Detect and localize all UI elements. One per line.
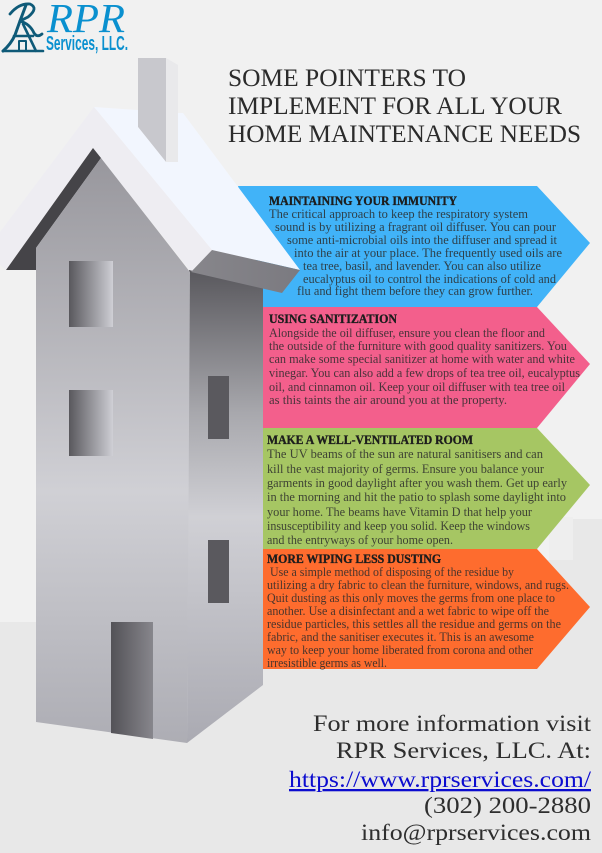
text block: ventilation xyxy=(267,446,567,547)
text block: ventilation: garments in good daylight after you wash them. Get up early xyxy=(267,475,567,490)
title xyxy=(228,65,581,148)
text block: immunity: flu and fight them before they can grow further. xyxy=(297,283,533,298)
heading: make a well-ventilated room: MAKE A WELL-VENTILATED ROOM xyxy=(267,433,473,447)
footer: contact information: info@rprservices.com xyxy=(361,820,591,845)
text block: wiping: residue particles, this settles all the residue and germs on the xyxy=(267,616,561,631)
logo: RPR Services, LLC. xyxy=(3,0,128,55)
text block: sanitization: can make some special sanitizer at home with water and white xyxy=(269,351,575,366)
text block: wiping: Quit dusting as this only moves the germs from one place to xyxy=(267,590,555,605)
window: front lower xyxy=(69,390,113,456)
window: side upper xyxy=(208,376,229,439)
text block: immunity: tea tree, basil, and lavender. You can also utilize xyxy=(303,258,541,273)
text block: wiping xyxy=(267,564,569,670)
roof eave xyxy=(191,250,300,293)
text block: wiping: another. Use a disinfectant and a wet fabric to wipe off the xyxy=(267,603,549,618)
text block: ventilation: kill the vast majority of germs. Ensure you balance your xyxy=(267,461,545,476)
text block: wiping: irresistible germs as well. xyxy=(267,655,387,670)
footer: contact information: RPR Services, LLC. At: xyxy=(336,738,591,763)
roof: right slope xyxy=(94,107,300,270)
panel: maintaining your immunity xyxy=(238,186,590,307)
title: SOME POINTERS TO xyxy=(228,65,466,92)
wall: side xyxy=(187,270,263,743)
icon: RA house monogram xyxy=(3,4,43,51)
window: side lower xyxy=(208,540,229,603)
text block: sanitization xyxy=(269,325,580,407)
text block: sanitization: oil, and cinnamon oil. Keep your oil diffuser with tea tree oil xyxy=(269,379,565,394)
title: HOME MAINTENANCE NEEDS xyxy=(228,121,581,148)
heading: more wiping less dusting: MORE WIPING LESS DUSTING xyxy=(267,552,441,566)
text block: ventilation: in the morning and hit the patio to splash some daylight into xyxy=(267,489,566,504)
text block: ventilation: insusceptibility and keep you solid. Keep the windows xyxy=(267,518,530,533)
title: IMPLEMENT FOR ALL YOUR xyxy=(228,93,562,120)
footer: contact information xyxy=(289,711,592,845)
door xyxy=(111,622,153,739)
text block: ventilation: The UV beams of the sun are natural sanitisers and can xyxy=(267,446,543,461)
text block: immunity xyxy=(269,206,562,298)
panel: make a well-ventilated room xyxy=(263,428,590,549)
footer: contact information: https://www.rprservices.com/ xyxy=(289,767,592,792)
text block: sanitization: as this taints the air around you at the property. xyxy=(269,392,507,407)
text block: wiping: Use a simple method of disposing of the residue by xyxy=(270,564,514,579)
text block: immunity: into the air at your place. The frequently used oils are xyxy=(294,245,562,260)
roof: front gable band xyxy=(0,107,212,272)
text block: sanitization: vinegar. You can also add a few drops of tea tree oil, eucalyptus xyxy=(269,365,580,380)
illustration: house xyxy=(0,58,300,743)
text block: immunity: sound is by utilizing a fragrant oil diffuser. You can pour xyxy=(275,219,557,234)
footer: contact information: (302) 200-2880 xyxy=(424,793,591,818)
arrow: pink xyxy=(263,307,590,428)
text block: sanitization: Alongside the oil diffuser, ensure you clean the floor and xyxy=(269,325,545,340)
text block: ventilation: your home. The beams have Vitamin D that help your xyxy=(267,504,533,519)
panel: more wiping less dusting xyxy=(263,549,590,670)
arrow: blue xyxy=(238,186,590,307)
gable shadow xyxy=(6,148,101,270)
heading: maintaining your immunity: MAINTAINING YOUR IMMUNITY xyxy=(269,194,457,208)
chimney xyxy=(138,58,178,162)
arrow: orange xyxy=(263,549,590,669)
text block: ventilation: and the entryways of your home open. xyxy=(267,532,453,547)
text block: immunity: some anti-microbial oils into the diffuser and spread it xyxy=(287,232,557,247)
heading: using sanitization: USING SANITIZATION xyxy=(269,312,397,326)
footer: contact information: For more information visit xyxy=(313,711,592,736)
wall: front xyxy=(36,158,190,743)
text block: wiping: utilizing a dry fabric to clean the furniture, windows, and rugs. xyxy=(267,577,569,592)
text block: wiping: fabric, and the sanitiser executes it. This is an awesome xyxy=(267,629,534,644)
text block: sanitization: the outside of the furniture with good quality sanitizers. You xyxy=(269,338,567,353)
panel: using sanitization xyxy=(263,307,590,428)
arrow: green xyxy=(263,428,590,549)
text block: wiping: way to keep your home liberated from corona and other xyxy=(267,642,534,657)
text block: immunity: The critical approach to keep the respiratory system xyxy=(269,206,528,221)
text block: immunity: eucalyptus oil to control the indications of cold and xyxy=(303,271,556,286)
logo subtitle: Services, LLC. xyxy=(46,33,128,55)
window: front upper xyxy=(69,261,113,327)
